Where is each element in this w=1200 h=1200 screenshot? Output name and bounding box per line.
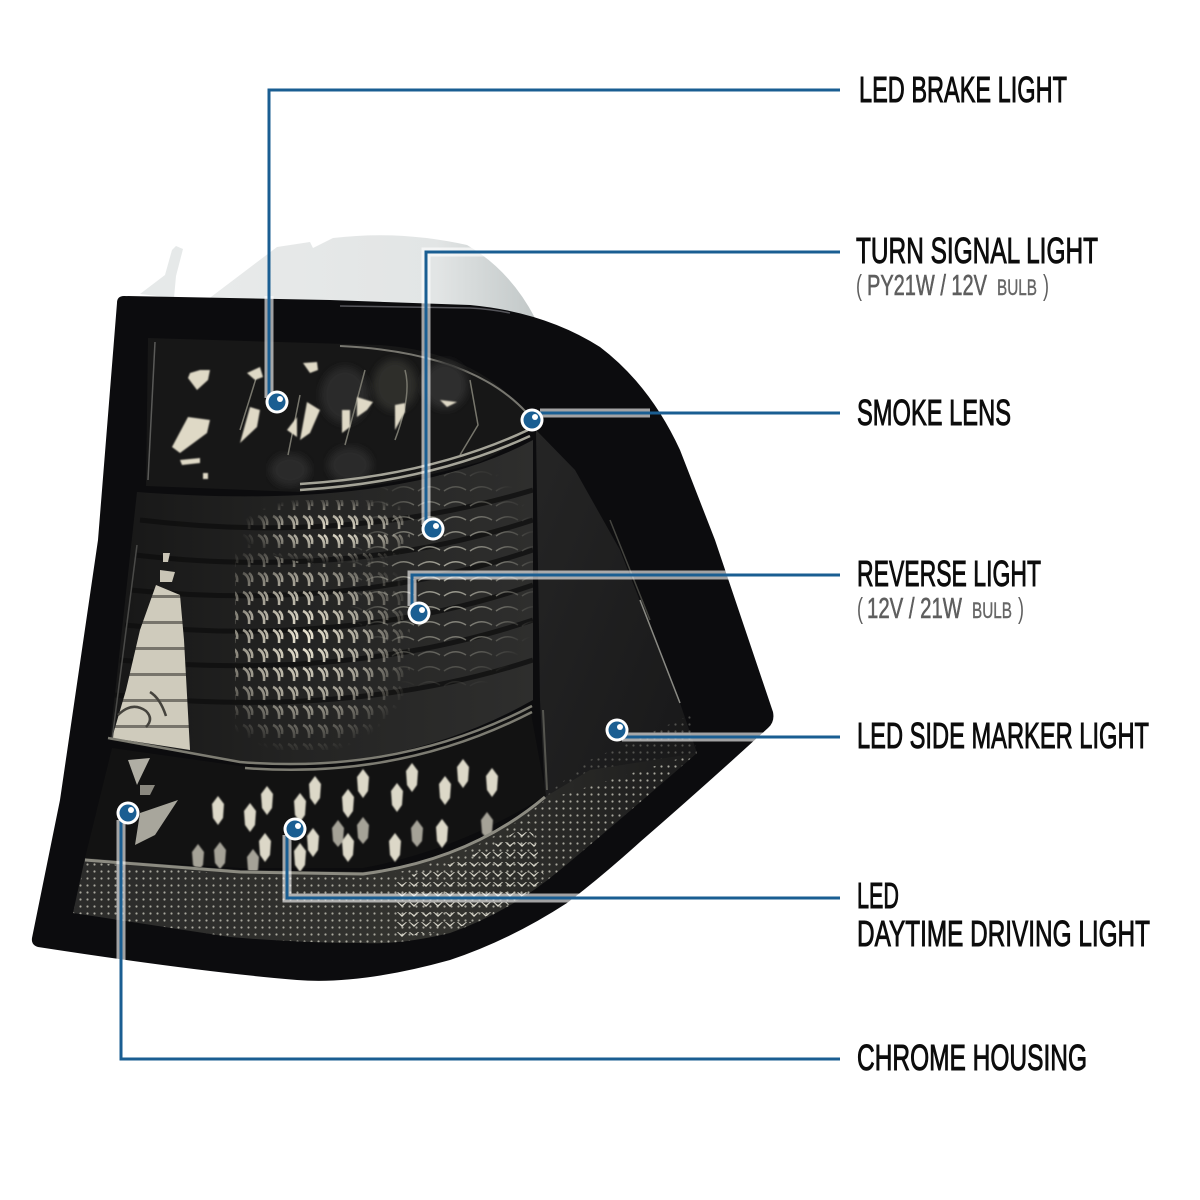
leader: turn signal light (422, 252, 840, 540)
label: smoke lens: SMOKE LENS (857, 392, 1011, 433)
label: reverse light: REVERSE LIGHT (857, 553, 1041, 594)
label: reverse light (857, 553, 1041, 625)
marker dot: smoke lens (520, 408, 544, 432)
upper LED lens section (146, 338, 530, 492)
label: turn signal light: ) (1043, 270, 1049, 302)
middle reverse light section (110, 440, 535, 764)
leader: LED daytime driving light (284, 818, 840, 898)
label: LED daytime driving light (857, 875, 1150, 954)
leader: LED brake light (266, 90, 840, 414)
label: reverse light: BULB (972, 598, 1012, 623)
bottom diamond strip (73, 753, 697, 943)
label: reverse light: ( (857, 593, 863, 625)
marker dot: reverse light (408, 602, 430, 624)
label: LED brake light: LED BRAKE LIGHT (859, 69, 1067, 110)
marker dot: chrome housing (116, 802, 140, 824)
leader: LED side marker light (606, 718, 840, 742)
label: turn signal light: BULB (997, 275, 1037, 300)
marker dot: LED brake light (266, 390, 288, 414)
top gloss line (340, 306, 510, 313)
chrome housing behind lens (140, 235, 535, 318)
label: turn signal light: PY21W / 12V (867, 270, 987, 302)
marker dot: turn signal light (422, 518, 444, 540)
leader: chrome housing (116, 802, 840, 1059)
label: chrome housing: CHROME HOUSING (857, 1037, 1087, 1078)
label: reverse light: 12V / 21W (867, 593, 962, 625)
label: LED daytime driving light: LED (857, 875, 899, 916)
leader: reverse light (408, 575, 840, 624)
label: turn signal light (856, 230, 1098, 302)
marker dot: LED daytime driving light (284, 818, 306, 840)
marker dot: LED side marker light (606, 718, 628, 742)
chrome wedge (135, 800, 178, 845)
leader: smoke lens (520, 408, 840, 432)
bright left reflector block (112, 585, 190, 750)
label: turn signal light: ( (856, 270, 862, 302)
right marker section (536, 430, 697, 840)
tail light body (32, 296, 773, 981)
label: reverse light: ) (1018, 593, 1024, 625)
lower LED section (85, 706, 546, 876)
